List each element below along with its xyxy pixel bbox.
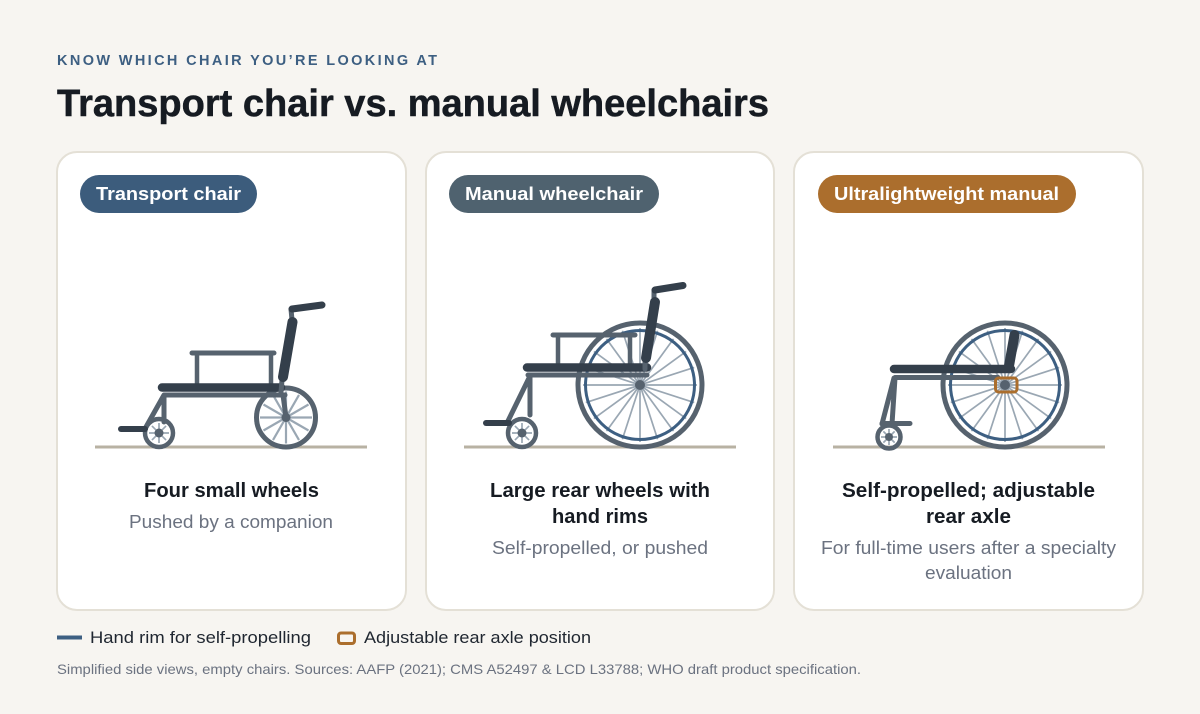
badge: manual wheelchair: Manual wheelchair [465, 184, 643, 204]
legend [57, 628, 591, 647]
caption: ultralightweight manual: For full-time users after a specialty [821, 538, 1116, 558]
footnote: Simplified side views, empty chairs. Sources: AAFP (2021); CMS A52497 & LCD L33788; WHO draft product specification. [57, 661, 861, 677]
icon: adjustable axle marker [996, 378, 1017, 392]
caption: ultralightweight manual: evaluation [925, 563, 1012, 583]
title: Transport chair vs. manual wheelchairs [57, 83, 769, 125]
legend item: hand rim: Hand rim for self-propelling [90, 628, 311, 647]
caption: manual wheelchair: hand rims [552, 506, 648, 528]
badge: manual wheelchair [449, 175, 659, 213]
panel: transport chair [57, 152, 406, 610]
legend item: adjustable axle: Adjustable rear axle position [364, 628, 591, 647]
illustration: transport chair [95, 305, 367, 447]
caption: ultralightweight manual: rear axle [926, 506, 1011, 528]
illustration: manual wheelchair [464, 286, 736, 447]
illustration: ultralightweight manual [833, 323, 1105, 448]
caption: transport chair [129, 480, 333, 532]
badge: transport chair [80, 175, 257, 213]
badge: ultralightweight manual: Ultralightweight manual [834, 184, 1059, 204]
caption: ultralightweight manual [821, 480, 1116, 583]
panel: ultralightweight manual [794, 152, 1143, 610]
caption: transport chair: Four small wheels [144, 480, 319, 502]
caption: transport chair: Pushed by a companion [129, 512, 333, 532]
caption: manual wheelchair [490, 480, 710, 558]
caption: manual wheelchair: Large rear wheels with [490, 480, 710, 502]
caption: ultralightweight manual: Self-propelled; adjustable [842, 480, 1095, 502]
caption: manual wheelchair: Self-propelled, or pushed [492, 538, 708, 558]
panel: manual wheelchair [426, 152, 774, 610]
badge: transport chair: Transport chair [96, 184, 241, 204]
eyebrow: KNOW WHICH CHAIR YOU’RE LOOKING AT [57, 53, 437, 69]
badge: ultralightweight manual [818, 175, 1076, 213]
